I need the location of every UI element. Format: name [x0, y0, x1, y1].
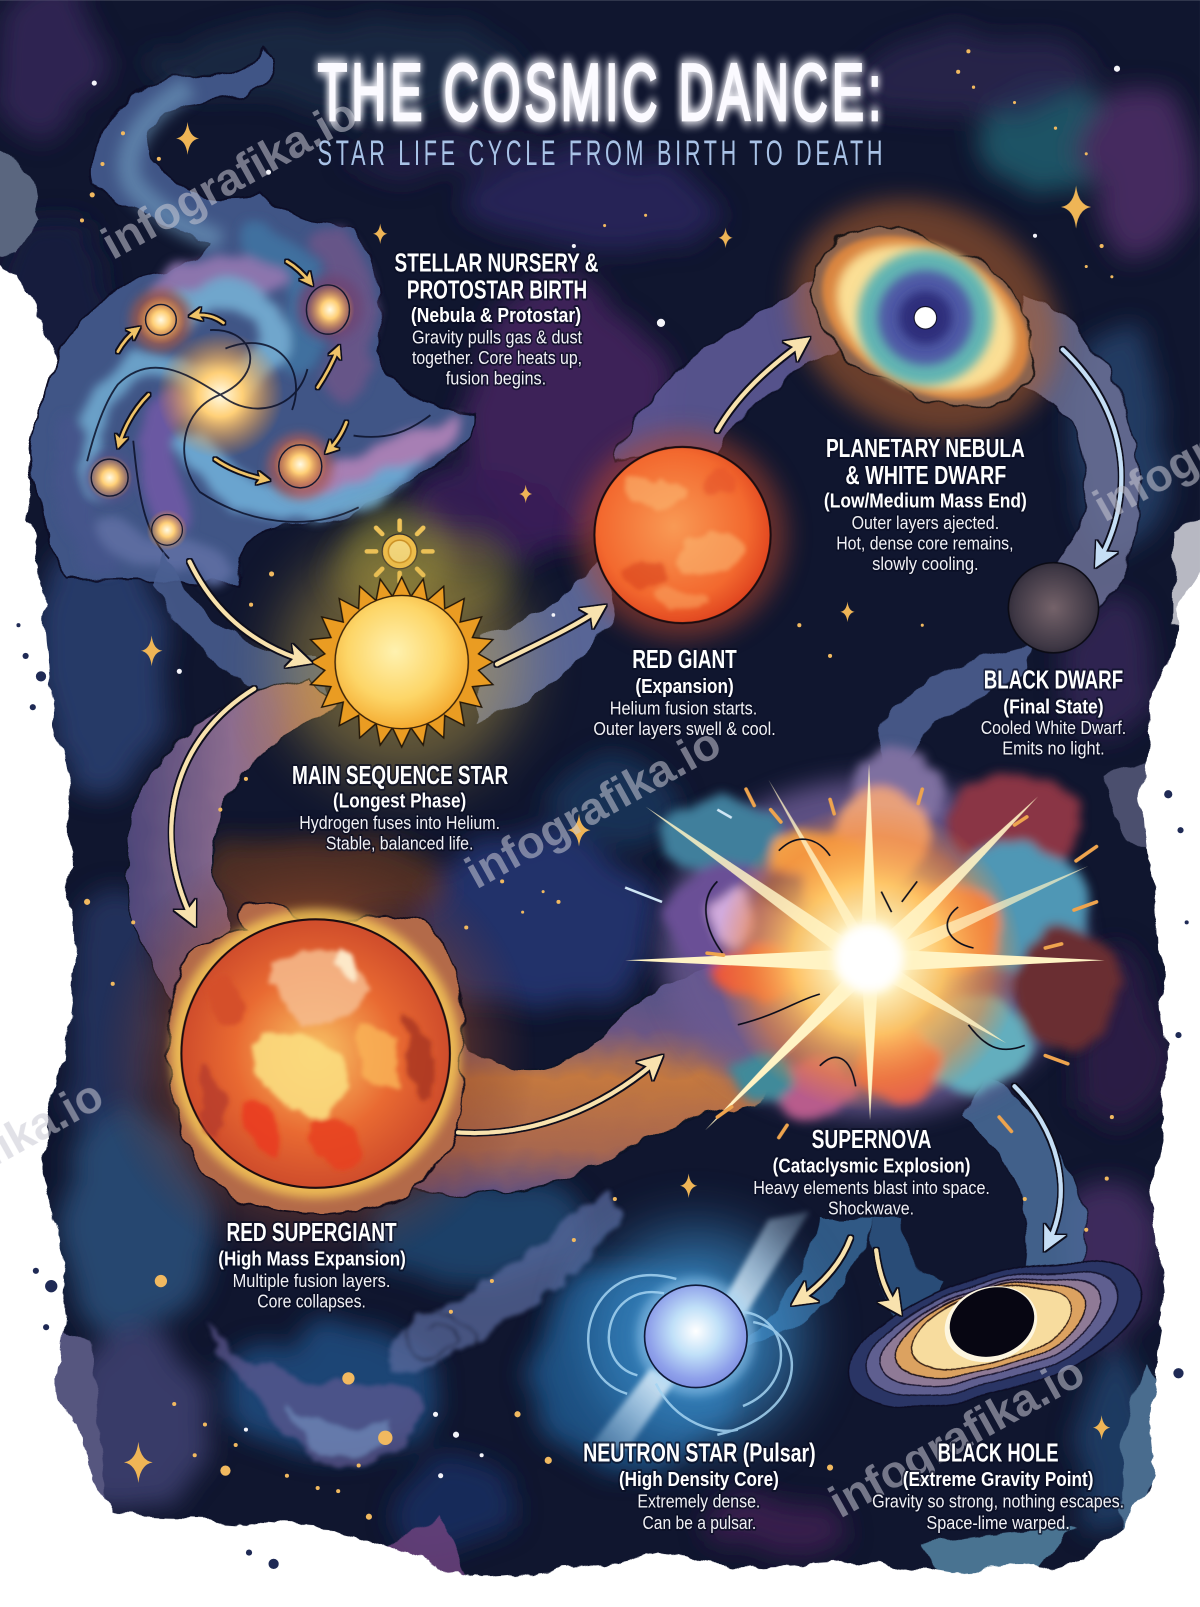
red giant star — [578, 430, 787, 640]
watermarks: infografika.io — [820, 1346, 1093, 1528]
label: black dwarf: Cooled White Dwarf. — [981, 717, 1126, 738]
pulsar beams — [591, 1211, 810, 1450]
scattered star dots — [80, 49, 1120, 1520]
small swirl arrows — [118, 261, 346, 480]
label: black hole: Gravity so strong, nothing escapes. — [872, 1491, 1124, 1512]
label: planetary nebula: Hot, dense core remains, — [836, 532, 1013, 553]
label: neutron star: (High Density Core) — [619, 1468, 779, 1491]
label: black dwarf: BLACK DWARF — [984, 667, 1123, 695]
label: supernova: SUPERNOVA — [812, 1126, 932, 1154]
label: planetary nebula: slowly cooling. — [872, 553, 979, 574]
nebula cloud body — [29, 50, 474, 586]
arrow: nursery to main sequence — [190, 562, 305, 661]
panel: stellar nursery nebula — [29, 50, 474, 586]
arrow: main sequence to red supergiant — [171, 689, 254, 920]
supernova explosion — [625, 748, 1117, 1138]
flow arrows — [171, 341, 1121, 1310]
label: supernova: (Cataclysmic Explosion) — [773, 1154, 970, 1177]
swirl core glow — [157, 331, 284, 458]
label: supernova — [753, 1126, 990, 1218]
explosion ink lines — [706, 839, 1025, 1086]
nebula halos — [85, 275, 363, 502]
label: red supergiant: Core collapses. — [257, 1291, 366, 1312]
label: main sequence star: MAIN SEQUENCE STAR — [292, 762, 508, 790]
label: planetary nebula — [824, 435, 1027, 574]
label: red supergiant: Multiple fusion layers. — [233, 1270, 390, 1291]
supergiant surface blotches — [198, 948, 434, 1168]
label: black hole: BLACK HOLE — [938, 1439, 1059, 1467]
star corona rays — [311, 577, 493, 747]
label: stellar nursery: Gravity pulls gas & dust — [412, 326, 582, 347]
swirl line work — [87, 330, 430, 559]
label: red giant: RED GIANT — [632, 646, 737, 674]
label: planetary nebula: Outer layers ajected. — [852, 512, 999, 533]
label: main sequence star: Hydrogen fuses into Helium. — [299, 812, 500, 833]
label: black hole: (Extreme Gravity Point) — [903, 1468, 1093, 1491]
planetary nebula and white dwarf — [750, 153, 1100, 482]
gold sparkle stars — [124, 122, 1110, 1483]
label: black dwarf — [981, 667, 1126, 758]
label: main sequence star: Stable, balanced life. — [326, 833, 473, 854]
small sun icon — [348, 502, 451, 605]
black dwarf — [1008, 563, 1099, 653]
main sequence star — [279, 539, 525, 785]
supernova rays — [625, 764, 1105, 1130]
small galaxy swirl — [405, 1311, 477, 1357]
red supergiant star — [95, 833, 536, 1274]
label: black dwarf: (Final State) — [1003, 695, 1104, 718]
label: stellar nursery: fusion begins. — [446, 367, 546, 388]
label: neutron star: Extremely dense. — [637, 1491, 760, 1512]
black hole — [832, 1231, 1157, 1438]
label: planetary nebula: & WHITE DWARF — [845, 462, 1006, 490]
ribbon: supernova to neutron star — [733, 1220, 871, 1353]
label: red supergiant: (High Mass Expansion) — [218, 1248, 406, 1271]
explosion debris — [707, 789, 1096, 1138]
ribbon: black dwarf to supernova — [876, 646, 1035, 789]
ribbon: red giant to nebula — [615, 277, 840, 461]
label: red giant — [593, 646, 776, 739]
arrow: supergiant to supernova — [458, 1060, 658, 1133]
supernova core glow — [715, 805, 1023, 1112]
arrow: main sequence to red giant — [497, 609, 601, 664]
label: red giant: Helium fusion starts. — [610, 697, 757, 718]
ribbon: main sequence to red supergiant — [126, 676, 338, 1025]
supergiant flames — [168, 902, 462, 1214]
tail wash — [129, 87, 220, 241]
protostars — [87, 283, 355, 550]
watermarks: infografika.io — [93, 87, 365, 269]
label: stellar nursery: PROTOSTAR BIRTH — [407, 276, 587, 304]
supernova coloured clouds — [661, 748, 1117, 1115]
label: neutron star — [583, 1439, 816, 1533]
arrow: nebula to black dwarf — [1063, 350, 1121, 562]
arrow: red giant to planetary nebula — [717, 341, 804, 430]
label: planetary nebula: (Low/Medium Mass End) — [824, 489, 1027, 512]
label: neutron star: Can be a pulsar. — [643, 1512, 756, 1533]
subtitle: STAR LIFE CYCLE FROM BIRTH TO DEATH — [318, 135, 883, 173]
label: red giant: (Expansion) — [635, 675, 734, 698]
label: black hole: Space-lime warped. — [926, 1512, 1070, 1533]
label: planetary nebula: PLANETARY NEBULA — [826, 435, 1025, 463]
ribbon: lower blue nebula centre — [287, 1404, 395, 1457]
label: stellar nursery: together. Core heats up, — [412, 347, 582, 368]
ribbon: nursery to main sequence — [154, 553, 328, 698]
label: supernova: Heavy elements blast into space. — [753, 1177, 990, 1198]
ribbon: nebula to black dwarf — [1009, 292, 1140, 615]
watermarks: infografika.io — [457, 717, 729, 898]
ribbon: red supergiant to supernova — [395, 963, 820, 1195]
nebula arms — [69, 241, 451, 569]
ribbon: lower purple nebula — [205, 1322, 425, 1466]
label: stellar nursery — [395, 250, 598, 388]
lower soft nebula wisps — [205, 1194, 625, 1466]
neutron star pulsar — [588, 1211, 810, 1450]
arrow: supernova to black hole short — [876, 1250, 898, 1310]
supernova base cloud — [661, 779, 1081, 1117]
red giant mottling — [625, 469, 745, 610]
label: stellar nursery: (Nebula & Protostar) — [411, 304, 581, 327]
paint splatter outside the edge — [16, 623, 1189, 1569]
label: black dwarf: Emits no light. — [1002, 737, 1105, 758]
ribbon: supernova to disk — [871, 1220, 943, 1343]
ribbon: supernova to black hole — [963, 1076, 1088, 1271]
accretion disk — [832, 1231, 1157, 1438]
event horizon — [935, 1274, 1047, 1374]
label: neutron star: NEUTRON STAR (Pulsar) — [583, 1439, 816, 1467]
title: THE COSMIC DANCE: — [318, 48, 882, 138]
label: main sequence star: (Longest Phase) — [333, 790, 466, 813]
label: red supergiant: RED SUPERGIANT — [226, 1219, 397, 1247]
arrow: supernova to neutron star — [797, 1238, 851, 1302]
panel: stream ribbons — [126, 277, 1140, 1353]
arrow: supernova to black hole — [1015, 1086, 1061, 1245]
label: black hole — [872, 1439, 1124, 1533]
label: red giant: Outer layers swell & cool. — [593, 718, 776, 739]
ribbon: main sequence to red giant — [477, 559, 615, 723]
label: stellar nursery: STELLAR NURSERY & — [395, 250, 598, 278]
label: main sequence star — [292, 762, 508, 854]
label: supernova: Shockwave. — [828, 1197, 914, 1218]
ribbon: lower wisp to galaxy swirl — [388, 1194, 625, 1373]
label: red supergiant — [218, 1219, 406, 1312]
magnetic field lines — [588, 1275, 792, 1435]
